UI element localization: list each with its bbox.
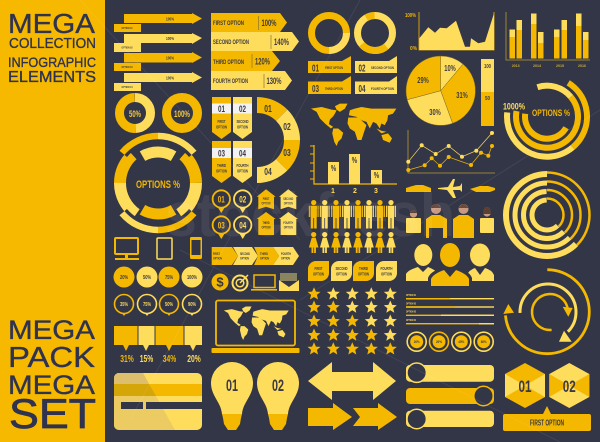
numbered ribbon tags: 03 [218,148,225,158]
numbered option flags: FIRST OPTION [325,66,343,70]
portrait figures [406,204,494,238]
option banners with percent values: FOURTH OPTION [213,79,248,85]
title: mega collection infographic elements [8,8,96,86]
percent pin circles row: 75% [143,302,151,308]
proportion bar with pointers [114,326,202,365]
up-arrow labels: SECOND [283,197,293,201]
solid right arrow [308,403,352,430]
arrow banners with option tags: OPTION 01 [122,26,133,30]
percent ring badges: 45% [458,340,465,344]
vertical scale bar [481,59,494,126]
numbered ribbon tags: FOURTH [236,163,248,168]
numbered option flags: 04 [358,84,366,95]
percent ring badges: 20% [436,340,443,344]
pin circles 01-04: 01 [218,194,225,206]
half donut 01-04: 04 [264,167,272,178]
icon: envelope [279,273,299,291]
world map [311,104,396,146]
percent bar chart [310,145,397,195]
up-arrow labels: THIRD [262,221,270,225]
percent pin circles row: 35% [120,302,128,308]
hexagon 02 [549,363,589,408]
numbered option flags: 01 [312,64,319,74]
progress sliders: OPTION 03 [406,310,416,314]
device icons [115,237,202,260]
chevron process: THIRD [260,252,268,256]
percent ring badges [407,332,493,351]
chevron process: OPTION [281,256,290,260]
numbered option flags: FOURTH OPTION [371,87,394,91]
stacked bar chart: 2016 [578,63,587,68]
laptop with world map [212,300,300,353]
percent pin circles row: 90% [188,302,196,308]
progress sliders [406,293,494,324]
half donut 01-04: 01 [264,104,272,115]
icon: dollar: $ [216,274,224,290]
light bulb 01: 01 [226,376,238,395]
percent circles row: 20% [120,275,128,281]
double-headed arrow [308,362,396,400]
numbered option flags [308,56,397,95]
stacked bar chart: 2015 [556,63,565,68]
percent bar chart: % [374,171,379,180]
pie chart: 10% [444,63,456,73]
arrow banners with option tags [114,13,202,91]
first option label box [503,406,591,431]
chevron process: OPTION [240,256,249,260]
pin circles 01-04: 03 [218,220,225,232]
icon: car [406,185,431,192]
title: mega pack mega set: SET [9,390,96,437]
large segmented ring: options %: OPTIONS % [136,179,180,191]
light bulb 02: 02 [272,376,284,395]
progress sliders: OPTION 01 [406,293,416,297]
chevron process: OPTION [260,256,269,260]
pie chart: 29% [417,75,429,85]
hexagon 01 [505,363,545,408]
option banners with percent values: THIRD OPTION [213,60,244,66]
toggle pills [406,363,494,429]
icon: target [232,275,248,290]
numbered ribbon tags: SECOND [236,119,249,124]
half donut 01-04: 03 [283,148,291,159]
icon: laptop [251,275,277,291]
proportion bar with pointers: 15% [140,354,153,365]
chevron process [212,247,299,265]
arrow banners with option tags: 100% [166,76,174,80]
stacked bar chart: 2014 [533,63,542,68]
donut 50%: 50% [129,109,141,120]
concentric arcs: options %: OPTIONS % [532,108,570,118]
arrow banners with option tags: 100% [166,36,174,41]
people pictograms [309,200,396,253]
option banners with percent values [211,13,299,90]
icon: plane [438,179,462,198]
concentric arcs: options %: 1000% [503,102,525,112]
area chart: 100% [405,13,416,19]
percent bar chart: % [331,164,336,173]
credit card [114,373,202,430]
leaf-shaped option tags: OPTION [313,272,324,276]
numbered option flags: 03 [312,84,319,95]
arrow banners with option tags: 100% [166,56,174,60]
leaf-shaped option tags: OPTION [358,272,369,276]
up-arrow labels: OPTION [284,202,293,206]
option banners with percent values: 120% [255,56,270,66]
proportion bar with pointers: 31% [120,354,134,365]
concentric arcs: options % [491,60,600,173]
donut 100% [166,98,198,128]
light bulb 01 [211,362,253,430]
pin circles 01-04: 02 [239,194,246,206]
area chart: 0% [410,46,418,52]
vertical scale bar: 50 [485,96,490,102]
title: mega pack mega set: MEGA [8,315,95,345]
icon: dollar [212,274,228,290]
title: mega collection infographic elements: INFOGRAPHIC [8,54,96,70]
leaf-shaped option tags: OPTION [336,272,347,276]
arrow banners with option tags: OPTION 04 [122,85,133,89]
numbered ribbon tags: 02 [239,104,246,114]
option banners with percent values: FIRST OPTION [213,21,244,27]
leaf-shaped option tags: OPTION [381,272,392,276]
percent pin circles row [114,294,202,316]
percent ring badges: 20% [414,340,420,344]
title: mega collection infographic elements: ELEMENTS [8,69,96,86]
chevron process: FOURTH [281,252,291,256]
concentric spiral rings [489,157,600,273]
numbered option flags: 02 [358,64,366,74]
chevron process: FIRST [213,252,220,256]
donut 100%: 100% [174,109,190,120]
up-arrow labels: OPTION [262,202,271,206]
light bulb 02 [257,362,299,430]
numbered ribbon tags: OPTION [237,124,248,130]
numbered option flags: SECOND OPTION [371,66,394,70]
title: mega collection infographic elements: MEGA [8,8,95,39]
leaf-shaped option tags [308,261,397,281]
arrow banners with option tags: OPTION 02 [122,46,133,50]
option banners with percent values: 100% [262,18,276,28]
leaf-shaped option tags: THIRD [359,266,368,271]
area chart [405,12,494,52]
numbered ribbon tags: THIRD [217,163,226,168]
option banners with percent values: 130% [266,76,282,86]
hexagon 01: 01 [518,377,532,396]
numbered ribbon tags: 04 [239,148,246,158]
percent ring badges: 80% [481,340,487,344]
option banners with percent values: 140% [274,37,289,47]
up-arrow labels: OPTION [284,226,293,230]
numbered ribbon tags: 01 [218,104,225,114]
title: mega pack mega set: PACK [8,342,96,374]
pie chart: 31% [456,90,468,100]
proportion bar with pointers: 34% [163,354,176,365]
up-arrow labels: FIRST [263,197,270,201]
chevron process: SECOND [240,252,250,256]
icon: boat [470,186,495,192]
leaf-shaped option tags: FIRST [314,266,323,271]
arrow banners with option tags: 100% [166,16,174,22]
percent circles row: 50% [143,275,151,281]
up-arrow labels: FOURTH [283,221,293,225]
progress sliders: OPTION 04 [406,318,416,322]
vertical scale bar: 100 [484,64,491,70]
title: mega pack mega set: MEGA [8,370,95,400]
stacked bar chart: 2013 [512,63,520,68]
leaf-shaped option tags: FOURTH [380,266,392,271]
progress sliders: OPTION 02 [406,301,416,305]
percent bar chart: % [352,156,357,165]
chevron process: OPTION [213,256,222,260]
percent bar chart: 3 [374,188,378,195]
title: mega pack mega set [8,315,96,437]
ring charts top [312,8,400,58]
numbered option flags: THIRD OPTION [325,87,343,91]
star rating grid [308,287,397,354]
watermark: stockfresh [165,181,455,250]
half donut 01-04 [208,91,306,189]
stacked bar chart [506,12,590,68]
half donut 01-04: 02 [283,122,291,133]
percent pin circles row: 50% [165,302,173,308]
title: mega collection infographic elements: COLLECTION [9,35,96,52]
arrow banners with option tags: OPTION 03 [122,65,133,69]
numbered ribbon tags: OPTION [216,168,227,174]
percent circles row: 100% [187,275,197,281]
first option label box: FIRST OPTION [530,418,564,428]
percent circles row: 75% [165,275,173,281]
numbered ribbon tags [212,97,252,183]
notched right arrow [353,403,397,430]
numbered ribbon tags: FIRST [218,119,226,124]
pie chart [406,56,475,125]
percent bar chart: 1 [331,188,335,195]
pin circles 01-04 [213,190,251,239]
numbered ribbon tags: OPTION [237,168,248,174]
percent bar chart: 2 [353,188,357,195]
proportion bar with pointers: 20% [187,354,201,365]
donut 50% [120,98,150,128]
numbered ribbon tags: OPTION [216,124,227,130]
percent circles row [114,266,202,288]
hexagon 02: 02 [563,377,576,396]
left yellow title panel [0,0,105,442]
user avatar group [406,241,494,288]
option banners with percent values: SECOND OPTION [213,40,249,46]
leaf-shaped option tags: SECOND [336,266,348,271]
circular arrows [503,270,589,354]
line chart [406,130,495,173]
large segmented ring: options % [92,117,224,249]
up-arrow labels: OPTION [262,226,271,230]
pie chart: 30% [429,107,441,117]
pin circles 01-04: 04 [239,220,247,232]
up-arrow labels [257,189,298,235]
